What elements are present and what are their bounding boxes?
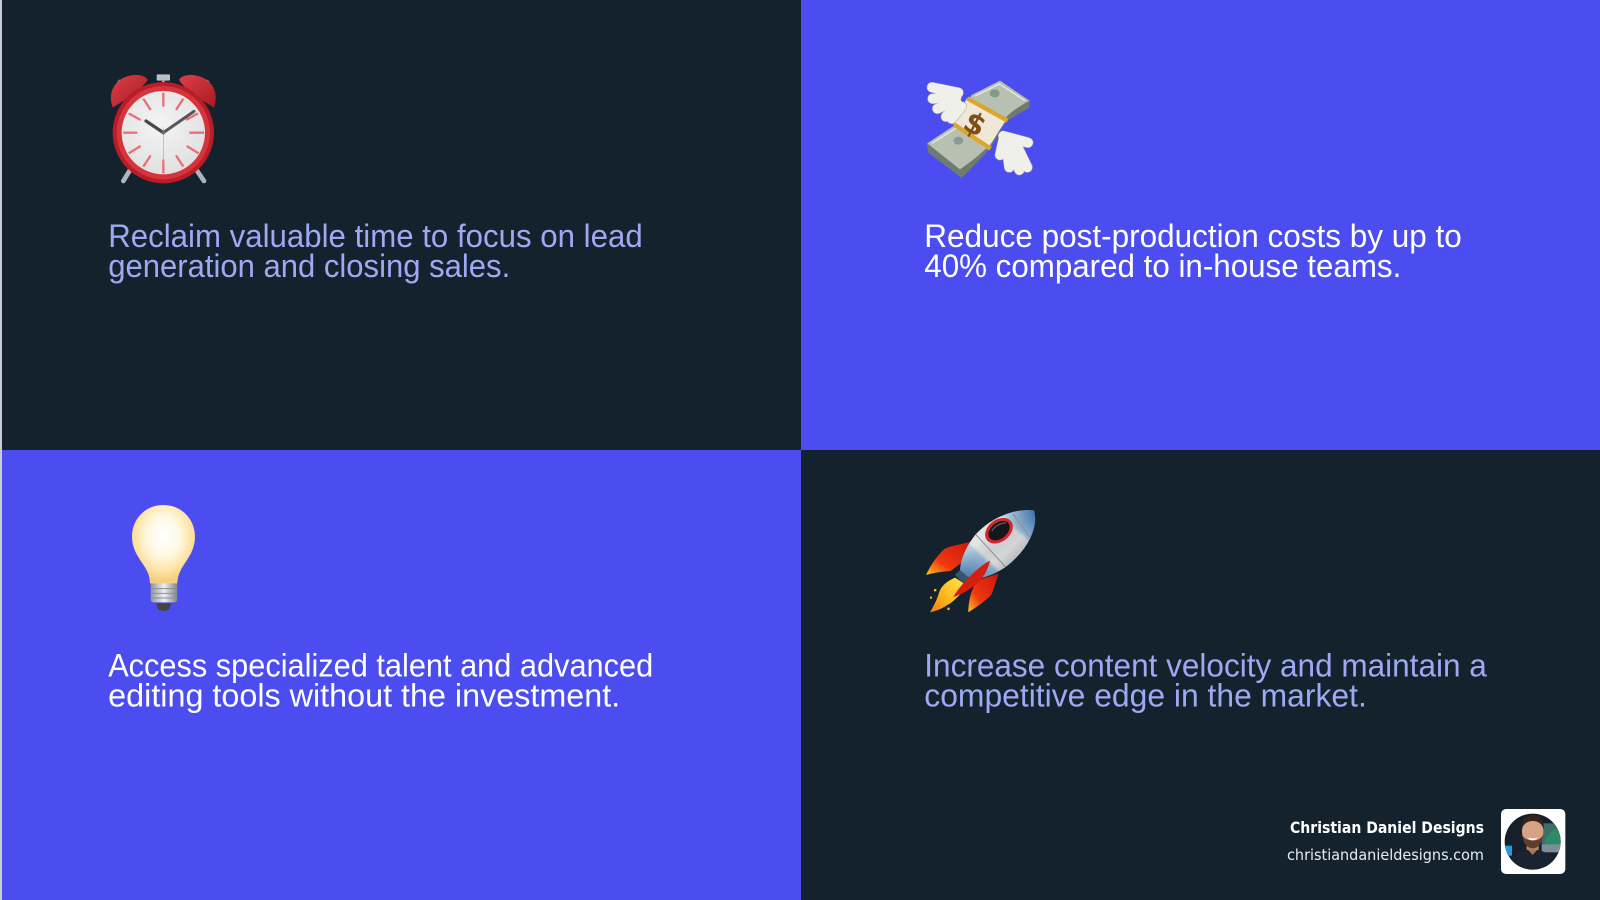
panel: velocity bbox=[926, 510, 1566, 874]
avatar badge bbox=[1500, 809, 1567, 874]
text: time benefit: Reclaim valuable time to focus on lead bbox=[108, 218, 643, 254]
icon: money with wings: $ bbox=[958, 104, 992, 144]
text: time benefit: generation and closing sales. bbox=[108, 248, 510, 284]
text: talent benefit bbox=[108, 648, 653, 714]
brand name: Christian Daniel Designs bbox=[1290, 818, 1484, 837]
brand website: christiandanieldesigns.com bbox=[1287, 846, 1484, 864]
text: cost benefit bbox=[924, 218, 1462, 284]
icon: money with wings bbox=[927, 81, 1030, 178]
panel: talent bbox=[2, 450, 801, 900]
text: cost benefit: Reduce post-production costs by up to bbox=[924, 218, 1462, 254]
icon: alarm clock bbox=[111, 74, 216, 183]
text: velocity benefit: Increase content velocity and maintain a bbox=[924, 648, 1487, 684]
panel: cost bbox=[801, 0, 1600, 450]
text: velocity benefit: competitive edge in the market. bbox=[924, 678, 1367, 714]
text: talent benefit: editing tools without the investment. bbox=[108, 678, 620, 714]
text: talent benefit: Access specialized talent and advanced bbox=[108, 648, 653, 684]
icon: light bulb bbox=[132, 505, 195, 611]
text: time benefit bbox=[108, 218, 643, 284]
page edge strip bbox=[0, 0, 2, 900]
text: velocity benefit bbox=[924, 648, 1487, 714]
icon: rocket bbox=[926, 510, 1035, 612]
panel: time bbox=[2, 0, 801, 450]
text: cost benefit: 40% compared to in-house teams. bbox=[924, 248, 1401, 284]
